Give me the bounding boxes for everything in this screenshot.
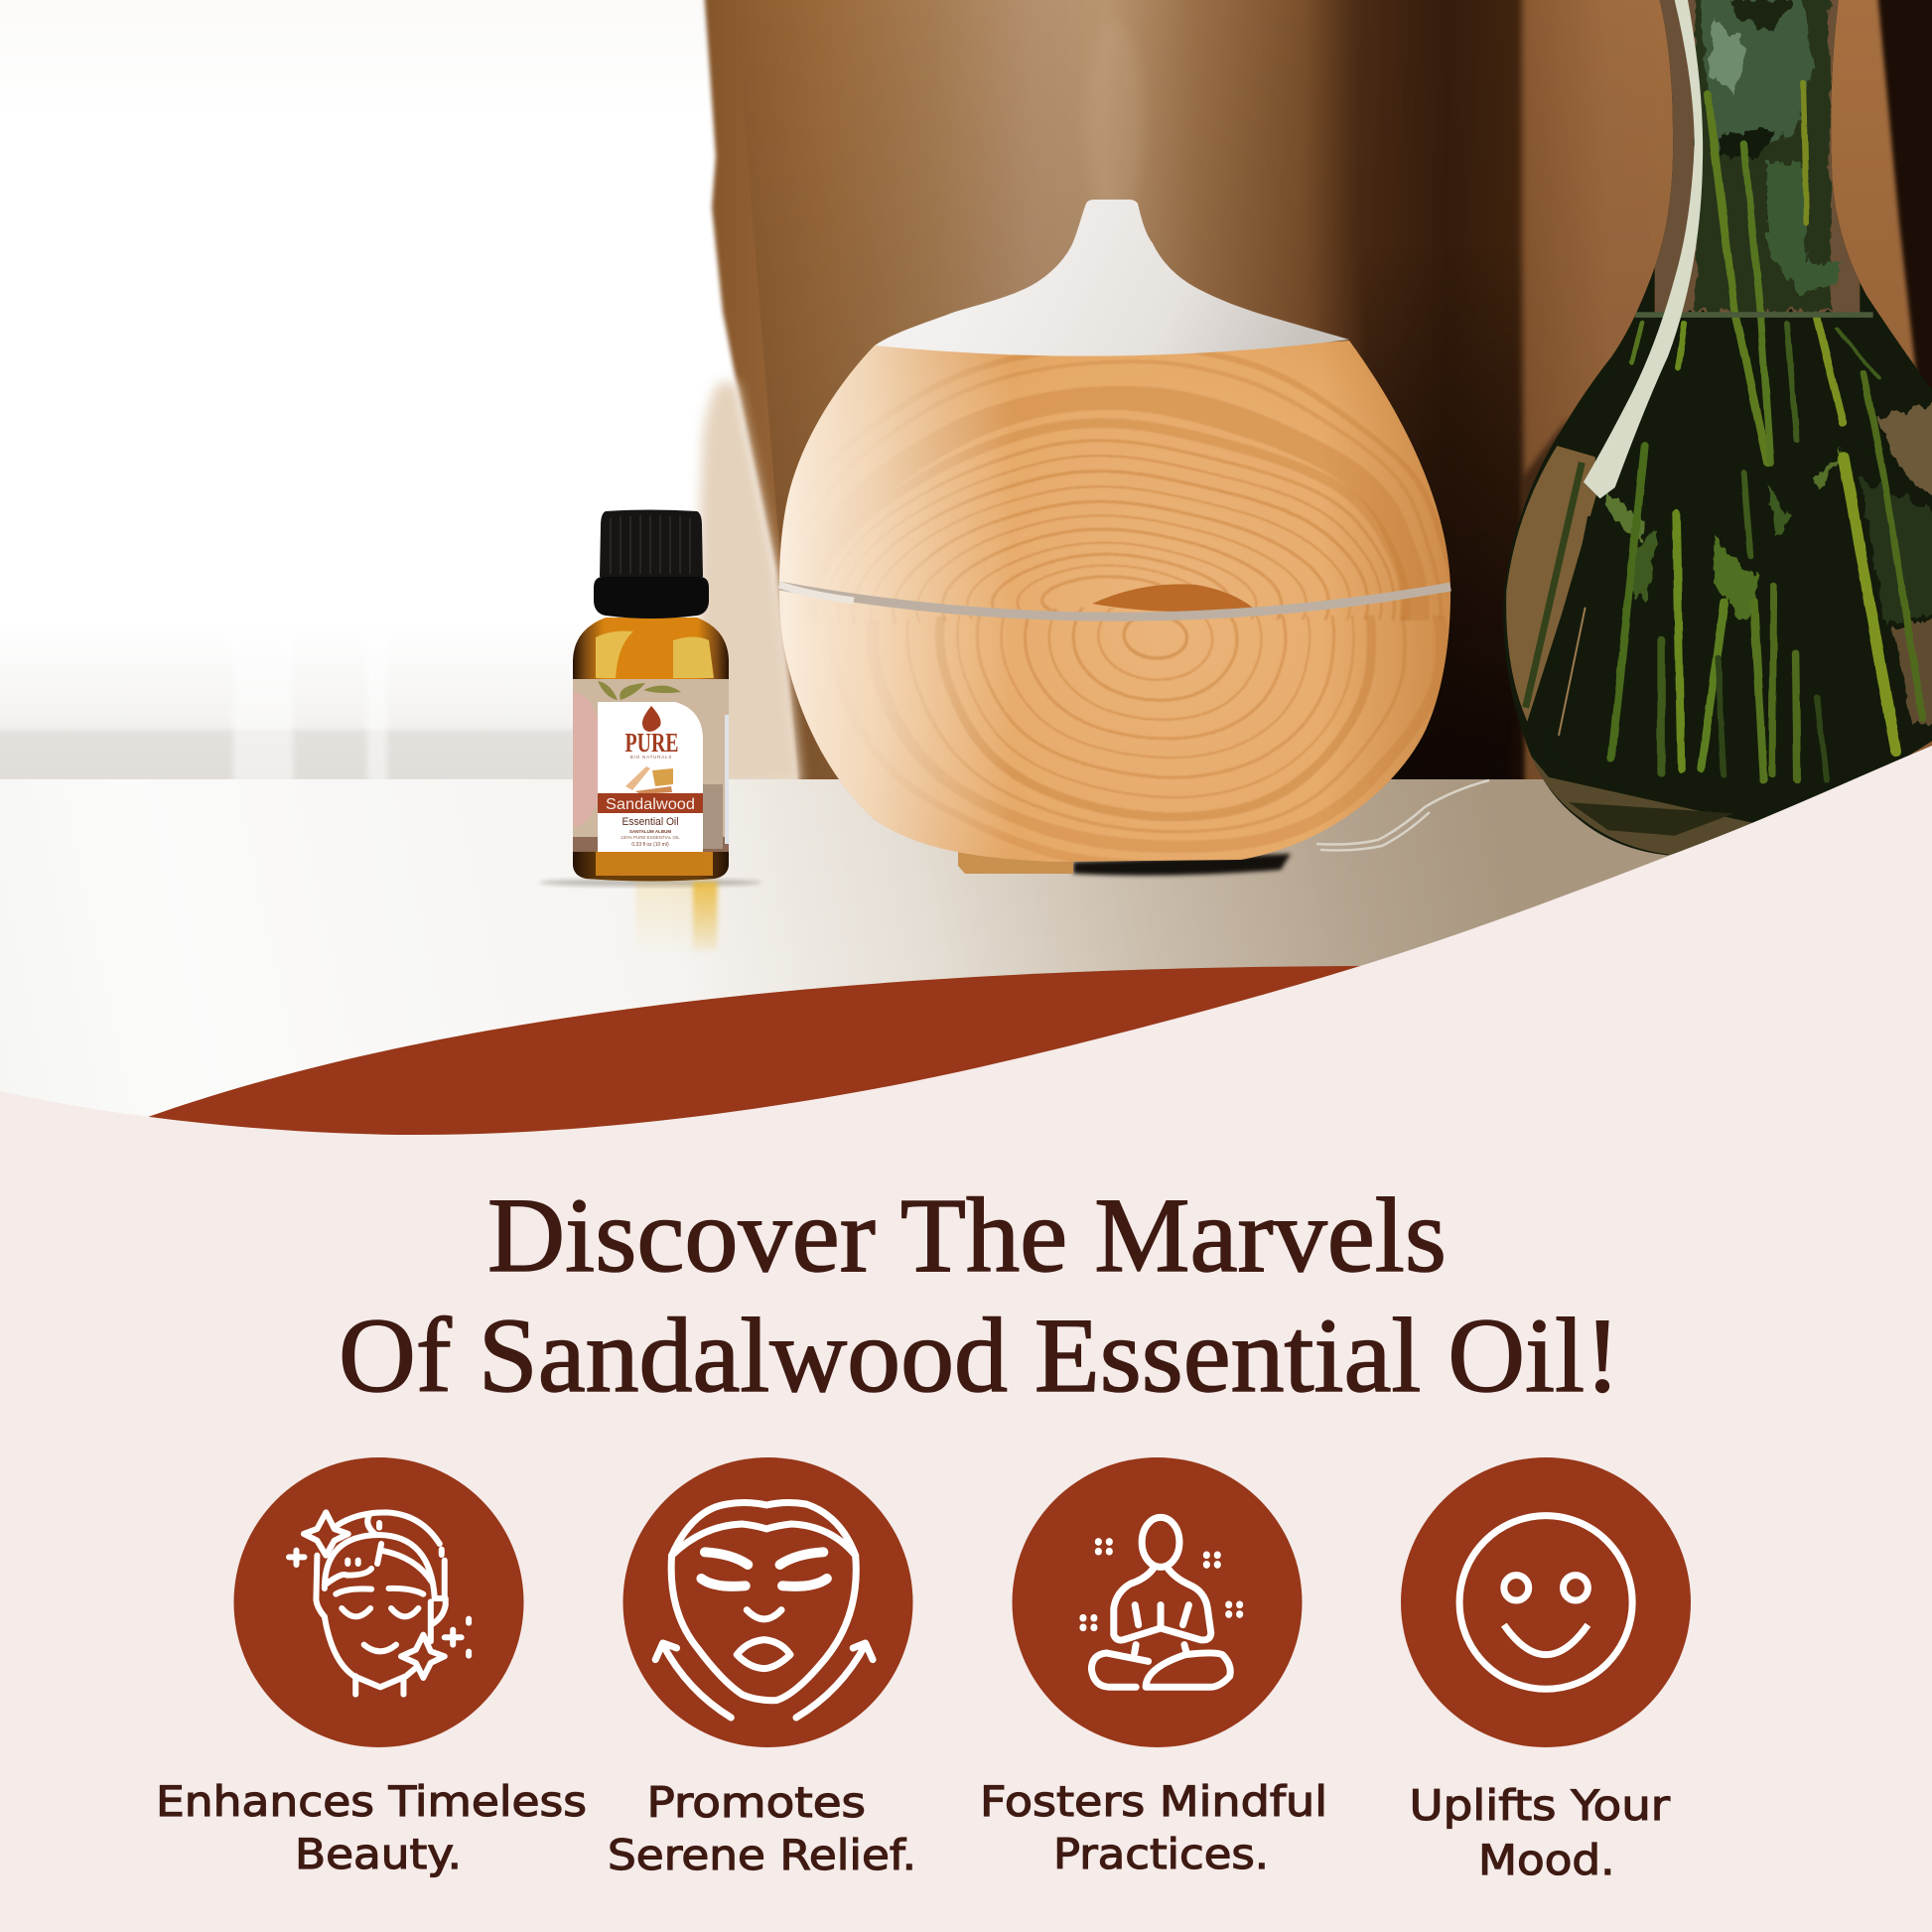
label: Mood. [1478,1836,1614,1884]
glass neck [1655,0,1860,315]
foliage and water [1555,0,1932,756]
transparent lower-left glass [1506,446,1597,722]
vase with green stems [1503,0,1932,855]
table top [0,779,1932,1176]
label small text: Essential Oil [621,816,679,828]
label [1410,1781,1671,1884]
brown curtain [702,0,1932,794]
plant stems [1611,83,1923,780]
label: Practices. [1053,1830,1269,1878]
logo text: PURE [625,728,679,758]
bottle label background [573,679,729,852]
shadow under diffuser [1073,854,1291,876]
sandalwood chips [625,766,673,794]
icon: smiley face [1459,1516,1632,1689]
label [156,1777,587,1878]
icon: face with lifting arrows [655,1503,873,1718]
seam ring [779,586,1450,617]
circle badge [1013,1457,1303,1747]
icon: meditating figure [1083,1517,1240,1687]
wood grain diffuser [764,200,1479,874]
label: Fosters Mindful [980,1777,1327,1826]
sandalwood essential oil bottle: SANTALUM ALBUM [629,829,671,834]
sandalwood essential oil bottle [573,510,729,882]
benefit: uplifted mood [1401,1457,1691,1884]
label: Serene Relief. [608,1831,916,1879]
label [608,1778,916,1879]
red band [598,793,703,813]
sandalwood essential oil bottle: Sandalwood [606,796,695,813]
sandalwood essential oil bottle: BIO NATURALS [630,755,672,759]
pale pink lower panel [0,746,1932,1932]
benefit: timeless beauty [156,1457,587,1878]
photo background: window, curtain and table [0,0,1932,1176]
cream curtain fold [698,382,801,784]
wooden body [779,341,1450,862]
glass highlight streak [1584,0,1703,498]
window with sheer curtain [0,0,774,794]
icon: woman's face with sparkles [289,1512,469,1695]
black cap [594,510,709,619]
knot in the wood [1092,584,1253,612]
benefit: serene relief [608,1457,916,1879]
label: Beauty. [295,1830,462,1878]
circle badge [623,1457,913,1747]
bottle reflection on table [539,879,761,951]
foot [958,852,1073,874]
sandalwood essential oil bottle: 100% PURE ESSENTIAL OIL [621,835,680,840]
label [980,1777,1327,1878]
dark red swoosh [148,966,1390,1152]
logo drop [642,706,661,732]
heading: Discover The Marvels [487,1177,1447,1295]
heading: Of Sandalwood Essential Oil! [339,1298,1620,1415]
label: Enhances Timeless [156,1777,587,1826]
white label panel [598,702,703,852]
steam rising from diffuser [1084,20,1144,218]
label: Promotes [647,1778,866,1827]
white ceramic cap [875,200,1349,356]
power cable [1316,780,1489,850]
benefit: mindful practices [980,1457,1327,1878]
heading [339,1177,1620,1415]
circle badge [234,1457,524,1747]
amber glass body [573,618,729,882]
sandalwood essential oil bottle: 0.33 fl oz (10 ml) [631,842,669,848]
label: Uplifts Your [1410,1781,1671,1830]
circle badge [1401,1457,1691,1747]
